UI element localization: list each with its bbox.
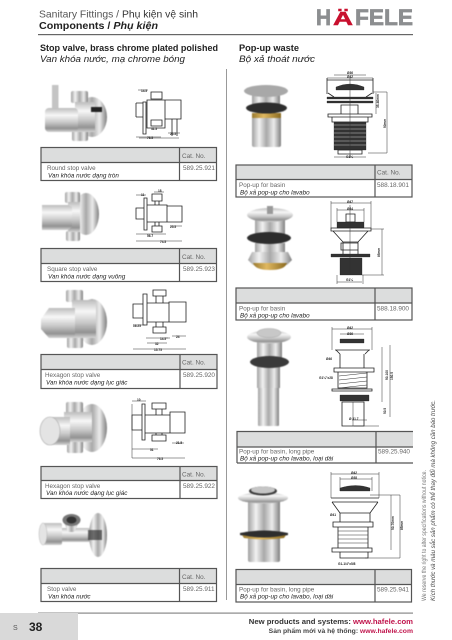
drawing: round stop valve: 76.5	[147, 136, 153, 140]
drawing: pop-up long pipe: Ø36	[347, 332, 353, 336]
drawing: pop-up short threaded	[330, 471, 404, 566]
logo: Hafele: H	[316, 5, 331, 30]
table: round stop valve: Round stop valve	[47, 165, 96, 172]
table: hexagon stop valve 2: Cat. No.	[182, 472, 206, 478]
disclaimer vertical text: We reserve the right to alter specifications without notice.	[422, 470, 428, 601]
table: pop-up short: 589.25.941	[377, 586, 409, 594]
table: square stop valve: 589.25.923	[183, 266, 215, 273]
table: stop valve: 589.25.911	[183, 586, 215, 593]
table: pop-up flat cap	[236, 165, 412, 197]
drawing: round stop valve: 41.5	[151, 127, 157, 131]
table: pop-up long pipe: 589.25.940	[378, 448, 410, 456]
photo: square stop valve	[42, 192, 99, 241]
table: stop valve	[41, 568, 216, 602]
heading: pop-up waste: Pop-up waste	[239, 43, 299, 53]
drawing: pop-up long pipe: Ø42	[347, 326, 353, 330]
table: square stop valve: Van khóa nước dạng vuông	[48, 274, 126, 280]
drawing: pop-up waste flat cap: Ø36	[347, 71, 353, 75]
drawing: pop-up short threaded: 85mm	[400, 521, 404, 530]
table: pop-up flat cap: Pop-up for basin	[239, 182, 286, 189]
drawing: pop-up long pipe: Ø46	[326, 357, 332, 361]
table: square stop valve	[41, 248, 216, 282]
table: pop-up knob	[236, 288, 412, 320]
table: hexagon stop valve 2: 589.25.922	[183, 483, 215, 490]
table: pop-up long pipe: Pop-up for basin, long pipe	[239, 448, 315, 456]
heading: stop valve: Stop valve, brass chrome plated polished	[40, 43, 218, 53]
heading: pop-up waste: Bộ xả thoát nước	[239, 54, 316, 64]
disclaimer vertical text: Kích thước và màu sắc sản phẩm có thể thay đổi mà không cần báo trước.	[430, 400, 437, 601]
photo: stop valve	[39, 513, 107, 557]
table: hexagon stop valve 2	[41, 466, 217, 498]
table: pop-up short	[236, 570, 412, 602]
footer links: Sản phẩm mới và hệ thống: www.hafele.com	[269, 627, 413, 635]
table: pop-up short: Pop-up for basin, long pipe	[239, 586, 315, 594]
drawing: hexagon stop valve: 15.75	[154, 348, 162, 352]
heading: stop valve: Van khóa nước, mạ chrome bóng	[40, 54, 185, 64]
drawing: pop-up waste flat cap: 35-40mm	[376, 94, 380, 108]
drawing: hexagon stop valve: 32	[155, 342, 159, 346]
drawing: hexagon stop valve: 14.5"	[160, 337, 168, 341]
photo: round stop valve	[45, 85, 107, 141]
drawing: hexagon stop valve round cap: 76.5	[157, 457, 163, 461]
drawing: pop-up waste with knob: Ø34	[347, 207, 353, 211]
drawing: pop-up short threaded: G1-1/4"x5/8	[338, 562, 356, 566]
footer rule	[38, 612, 413, 614]
table: stop valve: Stop valve	[47, 586, 77, 593]
table: round stop valve: 589.25.921	[183, 165, 215, 172]
column divider	[226, 69, 227, 600]
drawing: hexagon stop valve	[133, 290, 186, 352]
header title	[39, 10, 198, 32]
drawing: pop-up waste flat cap: 90mm	[383, 119, 387, 128]
drawing: square stop valve: 74.5	[160, 240, 166, 244]
photo: hexagon stop valve round cap	[40, 402, 107, 453]
drawing: square stop valve: 18	[158, 189, 162, 193]
table: pop-up long pipe	[237, 432, 413, 463]
photo: pop-up short threaded	[238, 486, 288, 562]
table: pop-up knob: Pop-up for basin	[239, 306, 286, 312]
header rule	[38, 34, 413, 35]
table: hexagon stop valve: Cat. No.	[182, 360, 206, 366]
drawing: pop-up short threaded: Ø42	[351, 471, 357, 475]
table: pop-up flat cap: Bộ xả pop-up cho lavabo	[240, 188, 310, 196]
table: stop valve: Cat. No.	[182, 574, 206, 581]
logo: Hafele: FELE	[355, 5, 413, 30]
table: hexagon stop valve 2: Van khóa nước dạng lục giác	[46, 490, 128, 497]
drawing: pop-up waste with knob: 85mm	[377, 248, 381, 257]
table: square stop valve: Cat. No.	[182, 254, 206, 261]
table: pop-up flat cap: 588.18.901	[377, 182, 409, 189]
drawing: square stop valve: 11	[141, 193, 145, 197]
heading: stop valve	[40, 43, 218, 64]
table: hexagon stop valve: Van khóa nước dạng lục giác	[46, 380, 128, 386]
drawing: pop-up waste flat cap: G1¼	[346, 155, 353, 159]
table: pop-up long pipe: Bộ xả pop-up cho lavabo, loại dài	[240, 454, 334, 462]
drawing: pop-up long pipe: Ø 31.7	[349, 417, 359, 421]
header title: Components / Phụ kiện	[39, 21, 158, 32]
table: round stop valve: Van khóa nước dạng tròn	[48, 172, 119, 180]
drawing: pop-up long pipe: 50.5	[383, 408, 387, 414]
drawing: pop-up waste flat cap	[327, 71, 387, 159]
table: stop valve: Van khóa nước	[48, 594, 91, 600]
footer links	[249, 617, 413, 635]
drawing: hexagon stop valve: 24	[176, 335, 180, 339]
footer links: New products and systems: www.hafele.com	[249, 617, 413, 626]
table: hexagon stop valve	[41, 354, 217, 388]
drawing: hexagon stop valve round cap: 51	[150, 448, 154, 452]
drawing: hexagon stop valve round cap: 21.5	[176, 441, 182, 445]
disclaimer vertical text	[422, 400, 437, 601]
photo: pop-up waste flat cap	[244, 85, 288, 147]
heading: pop-up waste	[239, 43, 316, 64]
page number tab	[0, 613, 78, 640]
table: pop-up knob: Bộ xả pop-up cho lavabo	[240, 312, 310, 320]
drawing: pop-up short threaded: 50-70mm	[391, 516, 395, 530]
drawing: hexagon stop valve round cap: 10	[137, 398, 141, 402]
drawing: round stop valve	[136, 89, 181, 140]
drawing: pop-up waste with knob: G1¼	[346, 278, 353, 282]
drawing: square stop valve	[136, 189, 182, 244]
drawing: pop-up long pipe: G1¼"x28	[319, 376, 333, 380]
page number tab: S	[13, 625, 18, 632]
table: round stop valve	[41, 148, 216, 180]
table: square stop valve: Square stop valve	[47, 266, 98, 273]
logo: Hafele	[316, 5, 413, 30]
table: hexagon stop valve 2: Hexagon stop valve	[45, 483, 101, 490]
drawing: pop-up short threaded: Ø38	[351, 476, 357, 480]
drawing: hexagon stop valve: 16.25	[133, 324, 141, 328]
table: round stop valve: Cat. No.	[182, 153, 206, 160]
table: hexagon stop valve: Hexagon stop valve	[45, 372, 101, 379]
drawing: pop-up short threaded: Ø41	[330, 513, 336, 517]
drawing: pop-up waste with knob	[331, 200, 384, 284]
drawing: pop-up waste flat cap: Ø42	[347, 75, 353, 79]
drawing: round stop valve: 26.5	[170, 132, 176, 136]
table: pop-up knob: 588.18.900	[377, 306, 409, 312]
photo: pop-up long pipe	[247, 328, 291, 426]
drawing: round stop valve: 14.5	[141, 89, 147, 93]
drawing: hexagon stop valve round cap	[132, 398, 185, 461]
logo: Hafele: Ä	[333, 9, 353, 29]
drawing: pop-up waste with knob: Ø47	[347, 200, 353, 204]
drawing: pop-up long pipe	[319, 326, 394, 426]
drawing: square stop valve: 25.5	[170, 225, 176, 229]
drawing: pop-up long pipe: 150.5	[390, 372, 394, 380]
photo: pop-up waste with knob	[247, 206, 293, 270]
page number tab: 38	[29, 620, 43, 634]
drawing: square stop valve: 56.7	[147, 234, 153, 238]
header title: Sanitary Fittings / Phụ kiện vệ sinh	[39, 10, 198, 20]
drawing: pop-up long pipe: 90-100	[385, 370, 389, 380]
table: pop-up flat cap: Cat. No.	[377, 170, 401, 176]
table: pop-up short: Bộ xả pop-up cho lavabo, loại dài	[240, 592, 334, 600]
table: hexagon stop valve: 589.25.920	[183, 372, 215, 379]
photo: hexagon stop valve	[41, 290, 107, 348]
